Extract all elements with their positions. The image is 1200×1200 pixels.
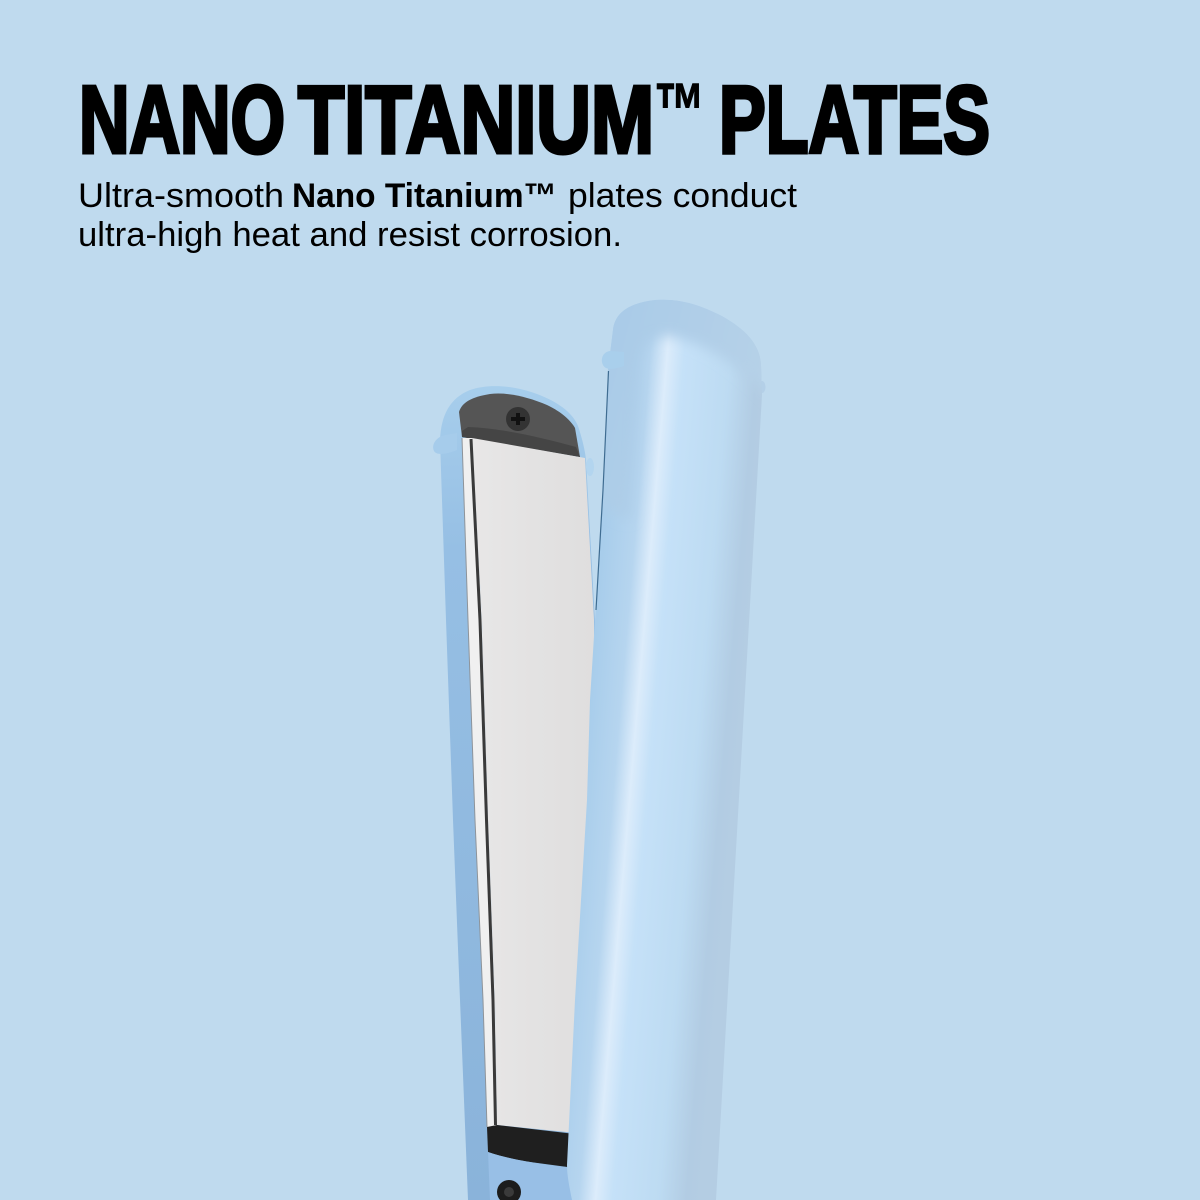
titanium plate xyxy=(472,438,596,1135)
top screw xyxy=(506,407,530,431)
subtitle text: Ultra-smooth xyxy=(78,177,284,215)
lower arm blue base xyxy=(488,1152,575,1200)
chrome outer line xyxy=(462,438,487,1127)
upper arm edge line xyxy=(596,371,608,610)
side nub xyxy=(586,458,594,476)
lower arm body xyxy=(440,386,596,1200)
title: NANO xyxy=(79,66,285,174)
upper arm nub xyxy=(602,351,624,369)
title: PLATES xyxy=(719,66,990,174)
upper arm body xyxy=(567,300,762,1200)
subtitle text: ultra-high heat and resist corrosion. xyxy=(78,216,622,254)
upper arm small back nub xyxy=(758,381,766,393)
title xyxy=(79,66,990,174)
chrome edge strip xyxy=(462,438,497,1127)
lower arm with titanium plate xyxy=(433,386,596,1200)
dark cap ledge xyxy=(462,427,580,457)
title: TITANIUM xyxy=(298,66,654,174)
lower screw xyxy=(497,1180,521,1200)
flat iron illustration xyxy=(433,300,766,1200)
title: ™ xyxy=(654,68,705,153)
upper arm xyxy=(567,300,766,1200)
dark end cap xyxy=(459,394,580,457)
subtitle text: plates conduct xyxy=(568,177,798,215)
subtitle text: Nano Titanium™ xyxy=(292,177,557,215)
lower dark band xyxy=(487,1125,575,1168)
subtitle text xyxy=(78,177,798,254)
lower arm nub xyxy=(433,433,457,454)
chrome dark line xyxy=(471,439,496,1125)
upper arm end shading xyxy=(646,300,738,359)
